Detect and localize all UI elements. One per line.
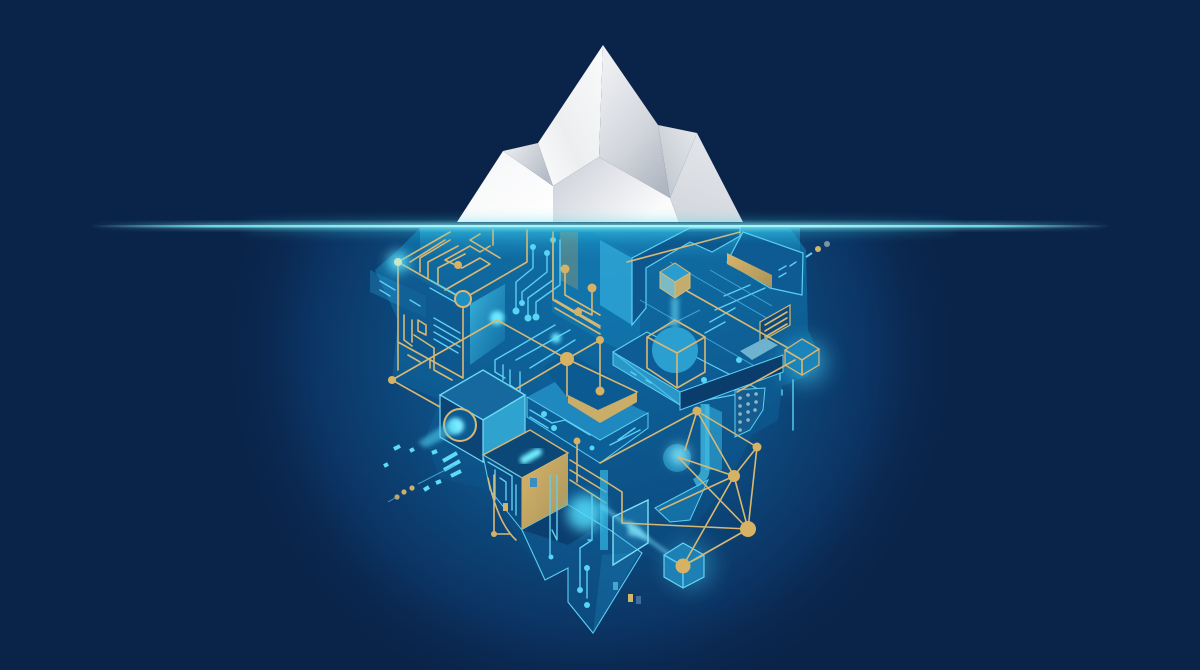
top face [660,263,690,282]
box column [560,232,578,290]
facet: front [553,157,679,222]
hub box [543,352,637,417]
gold circuit traces [404,234,500,380]
gold traces with nodes [553,232,600,334]
cube right face [483,395,525,462]
panel: centre traces [495,232,640,395]
panel: lower right glass [600,404,708,565]
tray top face [527,375,648,440]
gold link [627,232,797,353]
glow [785,342,825,382]
punched panel [735,388,765,437]
blue data bars [430,280,460,353]
bright node [388,252,408,272]
gold cube [660,263,690,298]
ring node [455,291,471,307]
gold tie [737,360,795,392]
gold panel [727,253,772,288]
platform top [613,332,760,405]
blue traces [516,238,560,318]
waterline [90,220,1110,234]
panel: lower spike [522,470,642,633]
lens glow [448,418,464,434]
left face [660,272,675,298]
far right dots [815,246,821,252]
tall cube [632,228,740,325]
hull silhouette [375,228,815,480]
center glass face [470,284,505,365]
cyan dashes [705,285,765,333]
glass panel [613,500,648,565]
neon column [705,404,722,470]
facet: left shoulder [503,143,553,186]
left tile [370,270,400,306]
top glow [420,228,800,252]
ribbon panel [655,480,708,522]
gold face [522,453,568,530]
gold chevron [568,392,637,423]
blue glow spot [490,311,504,325]
traces [550,475,592,598]
long bar [680,355,783,410]
panel: network graph [600,406,762,588]
line edge glow [90,223,1110,229]
lens beam [418,418,458,448]
lens ring [444,409,476,441]
dark face [400,272,462,338]
left dashes [384,446,461,490]
wire cube right [785,339,825,382]
right face [675,273,690,298]
tray traces [530,410,640,445]
bright slab [628,520,650,540]
vertical loop [695,404,705,483]
cube glow [668,544,712,588]
sphere [652,327,698,373]
bar highlight [740,338,778,360]
facet: centre left [538,45,603,186]
cube left face [440,395,483,462]
triangle shard [593,552,640,633]
glow globe [663,444,691,472]
right tall box [727,232,803,295]
panel: central hub [388,320,648,463]
bright beam [480,396,505,410]
cyan column [600,470,608,550]
hex cube [664,543,712,588]
beam to sphere [671,298,679,328]
tray front [527,397,648,463]
iceberg infographic scene [94,45,1106,670]
panel: gold box lower left [483,430,606,540]
wire cube over sphere [647,320,705,388]
iceberg tip [457,45,743,222]
facet: right shoulder [658,125,697,198]
gold dashes [394,494,400,500]
drip columns [780,358,793,430]
line glow [240,220,960,234]
dark wedge [522,505,600,545]
tiny squares [613,582,618,590]
panel: lens cube [384,370,525,502]
underwater circuit iceberg [370,228,830,633]
document icon [760,305,790,342]
bright slot [524,452,538,460]
frame lines [398,230,527,378]
cube body [664,543,704,588]
line core [90,225,1110,227]
platform front [613,352,680,405]
sheet [760,305,790,342]
glow burst [567,495,603,531]
panel: central platform with sphere [613,320,795,470]
box top [483,430,568,478]
graph nodes [692,406,702,416]
hub links [392,320,637,407]
traces on left [488,462,516,515]
graph links [600,411,757,566]
large box [552,253,640,348]
cube top [440,370,525,420]
underwater glow [264,228,917,670]
tall cube left face [600,240,632,325]
dots [701,377,707,383]
cube [785,339,819,375]
facet: centre right [599,45,670,198]
spike glass body [522,505,642,633]
facet: right [670,133,743,222]
box left face [483,455,522,530]
lower left circuit lines [495,325,575,395]
panel: upper right blocks [600,228,830,430]
panel: upper left circuit block [370,230,527,380]
beam [600,505,670,555]
blue chip [530,478,537,487]
facet: left [457,151,553,222]
gold node [454,261,462,269]
fine gold traces [570,441,606,503]
small bars [779,262,796,277]
